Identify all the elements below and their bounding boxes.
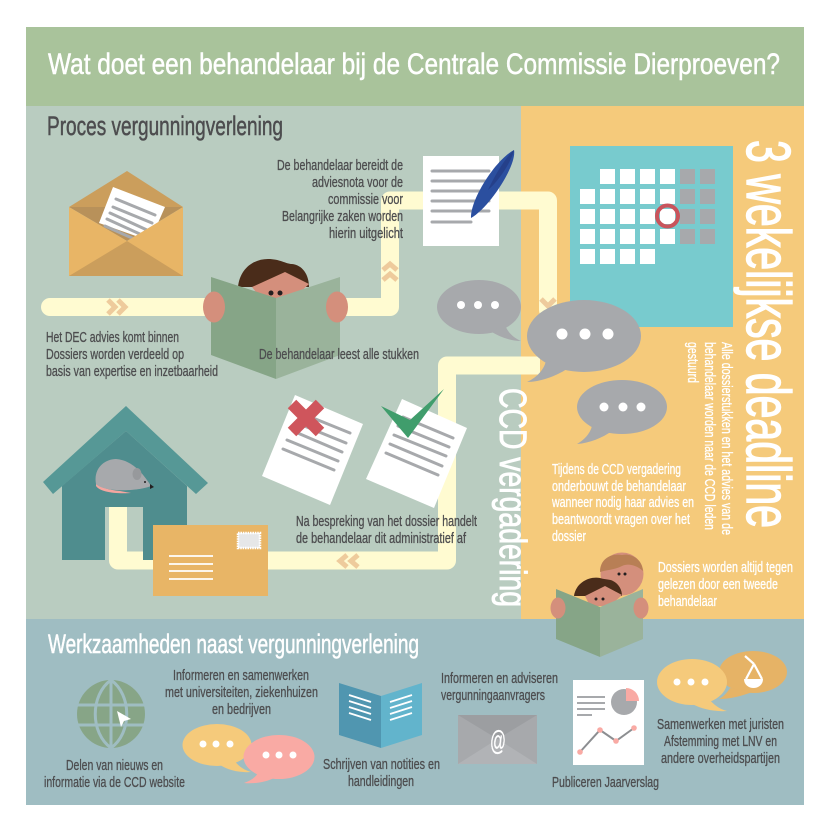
icon: open envelope [69,171,183,276]
icon: closed envelope [153,525,268,596]
arrow: process path bottom [118,366,540,560]
icon: speech bubble large [527,300,641,382]
text: DEC advies: basis van expertise en inzetbaarheid [46,363,218,380]
arrow: chevrons up [383,264,397,280]
text: tijdens de CCD vergadering [551,461,694,545]
icon: email envelope [458,715,537,764]
panel: deadline and CCD meeting [521,106,804,619]
text: tijdens de CCD vergadering: wanneer nodig haar advies en [551,494,694,511]
text: dossierstukken: behandelaar worden naar de CCD leden [701,342,718,530]
icon: mouse [96,459,154,493]
icon: speech bubble lower [577,380,667,444]
text: dossierstukken: gestuurd [684,342,701,383]
icon: annual report [573,680,644,765]
text: DEC advies: Het DEC advies komt binnen [46,329,179,346]
text: website [44,757,185,791]
text: adviesnota: Belangrijke zaken worden [282,208,403,225]
text: tegen gelezen: behandelaar [658,593,717,610]
text: tijdens de CCD vergadering: dossier [552,528,586,545]
text: administratief: Na bespreking van het dossier handelt [296,513,478,530]
text: DEC advies [46,329,218,380]
text: samenwerken: en bedrijven [212,701,271,718]
arrow: process path top [50,200,548,310]
text: notities [323,756,440,790]
icon: calendar [570,146,733,327]
icon: blue book [339,683,422,748]
icon: rejected document [262,395,363,505]
text: adviseren [441,670,558,704]
icon: email envelope: @ [490,725,506,756]
text: behandelaar leest: De behandelaar leest alle stukken [259,346,419,363]
icon: behandelaar reading [203,259,348,379]
arrow: chevrons right [108,300,125,314]
icon: document with pen [423,150,514,246]
panel: title band [26,27,804,106]
icon: orange and pink bubbles [182,724,314,783]
text: adviesnota: De behandelaar bereidt de [277,157,403,174]
icon: house with mouse [43,406,208,560]
heading: 3 wekelijkse deadline: 3 wekelijkse deadline [733,140,802,528]
text: juristen [657,716,784,767]
text: adviesnota [277,157,404,242]
text: samenwerken [165,667,318,718]
icon: approved document [366,389,467,508]
heading: werkzaamheden: Werkzaamheden naast vergunningverlening [48,629,419,659]
text: website: informatie via de CCD website [44,774,185,791]
text: administratief: de behandelaar dit administratief af [296,530,467,547]
text: juristen: Samenwerken met juristen [657,716,784,733]
text: adviesnota: commissie voor [328,191,403,208]
heading: CCD vergadering: CCD vergadering [491,388,533,607]
icon: legal bubbles [657,651,787,711]
text: DEC advies: Dossiers worden verdeeld op [46,346,184,363]
icon: globe [77,680,145,748]
text: juristen: Afstemming met LNV en [664,733,777,750]
text: tegen gelezen: gelezen door een tweede [658,576,778,593]
panel: werkzaamheden [26,619,804,805]
text: adviseren: vergunningaanvragers [441,687,545,704]
text: notities: handleidingen [348,773,414,790]
text: tijdens de CCD vergadering: Tijdens de CCD vergadering [552,461,681,478]
text: jaarverslag: Publiceren Jaarverslag [552,774,659,791]
text: tegen gelezen [658,559,793,610]
icon: two readers [550,552,648,657]
text: administratief [296,513,478,547]
text: dossierstukken [684,342,735,535]
text: samenwerken: met universiteiten, ziekenhuizen [165,684,318,701]
heading: proces vergunningverlening: Proces vergunningverlening [47,111,283,141]
text: tijdens de CCD vergadering: beantwoordt vragen over het [552,511,691,528]
text: notities: Schrijven van notities en [323,756,440,773]
arrow: chevrons left [340,555,358,567]
icon: speech bubble small [437,280,521,341]
text: adviesnota: hierin uitgelicht [329,225,404,242]
text: dossierstukken: Alle dossierstukken en het advies van de [718,342,735,535]
text: samenwerken: Informeren en samenwerken [173,667,309,684]
text: website: Delen van nieuws en [66,757,163,774]
panel: proces vergunningverlening [26,106,521,619]
arrow: chevron down [541,299,555,306]
text: tijdens de CCD vergadering: onderbouwt de behandelaar [552,478,686,495]
text: adviesnota: adviesnota voor de [312,174,403,191]
text: juristen: andere overheidspartijen [661,750,780,767]
text: adviseren: Informeren en adviseren [441,670,558,687]
